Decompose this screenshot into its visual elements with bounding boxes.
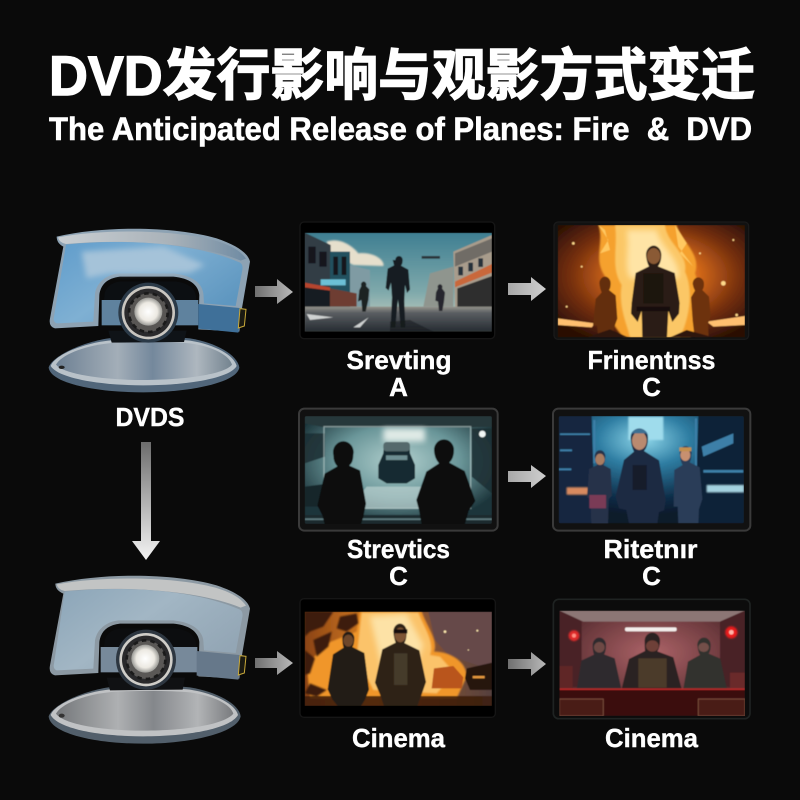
right guard — [683, 638, 727, 689]
icon: DVD projector device top — [49, 229, 250, 392]
small figures — [358, 282, 369, 312]
device body — [50, 229, 250, 333]
label: Srevting A — [346, 345, 452, 402]
label: Strevtics C: Strevtics — [347, 534, 450, 564]
panel: street scene — [300, 222, 495, 339]
panel: fire scene — [554, 222, 749, 339]
frame — [553, 599, 750, 719]
panel: red room scene — [553, 599, 750, 719]
device body — [50, 576, 250, 680]
frame — [553, 409, 750, 531]
arrow: streaming to fire — [508, 277, 546, 301]
label: Frinentnss C — [588, 345, 716, 402]
left figure — [328, 632, 369, 706]
device base — [49, 331, 239, 392]
desk — [559, 689, 745, 716]
arrow: top device to streaming — [255, 279, 293, 304]
arrow: explosion to screening room — [508, 652, 546, 676]
street image — [305, 233, 492, 332]
right silhouette — [416, 439, 475, 525]
label: Ritetnır C — [604, 534, 698, 591]
main figure — [386, 256, 410, 327]
car — [378, 443, 415, 483]
title: DVD发行影响与观影方式变迁 — [49, 44, 755, 107]
left guard — [577, 638, 621, 689]
burning car — [432, 666, 463, 688]
label: Ritetnır C: Ritetnır — [604, 534, 698, 564]
device lens — [116, 630, 176, 690]
label: Strevtics C: C — [389, 561, 408, 591]
label: Cinema right: Cinema — [605, 723, 699, 753]
left crew — [587, 450, 612, 526]
silhouette image — [305, 416, 492, 525]
subtitle: The Anticipated Release of Planes: Fire & DVD — [49, 111, 752, 147]
label: Srevting A: A — [389, 372, 408, 402]
side figures — [593, 277, 617, 337]
left silhouette — [317, 441, 366, 525]
red room image — [559, 611, 745, 716]
panel: blue crew scene — [553, 409, 750, 531]
right crew — [674, 446, 702, 523]
frame — [300, 222, 495, 339]
frame — [300, 599, 495, 717]
label: Frinentnss C: C — [642, 372, 661, 402]
panel: silhouette scene — [299, 409, 498, 531]
device lens — [118, 283, 178, 343]
frame — [299, 409, 498, 531]
label: Frinentnss C: Frinentnss — [588, 345, 716, 375]
arrow: bottom device to cinema — [255, 651, 293, 675]
label: Strevtics C — [347, 534, 450, 591]
panel: explosion scene — [300, 599, 495, 717]
frame — [554, 222, 749, 339]
right figure — [375, 624, 426, 706]
central crew — [616, 428, 666, 523]
device base — [49, 678, 241, 744]
central figure — [631, 246, 680, 338]
label: Cinema left: Cinema — [352, 723, 446, 753]
label: Ritetnır C: C — [642, 561, 661, 591]
icon: DVD projector device bottom — [49, 576, 250, 744]
fire image — [558, 225, 745, 338]
explosion image — [305, 612, 492, 706]
label: Srevting A: Srevting — [346, 345, 452, 375]
arrow: vertical DVD to DVD — [132, 442, 160, 560]
arrow: silhouette to crew — [508, 465, 546, 488]
blue crew image — [559, 416, 744, 526]
central guard — [622, 633, 682, 689]
label: DVDS: DVDS — [116, 402, 184, 432]
